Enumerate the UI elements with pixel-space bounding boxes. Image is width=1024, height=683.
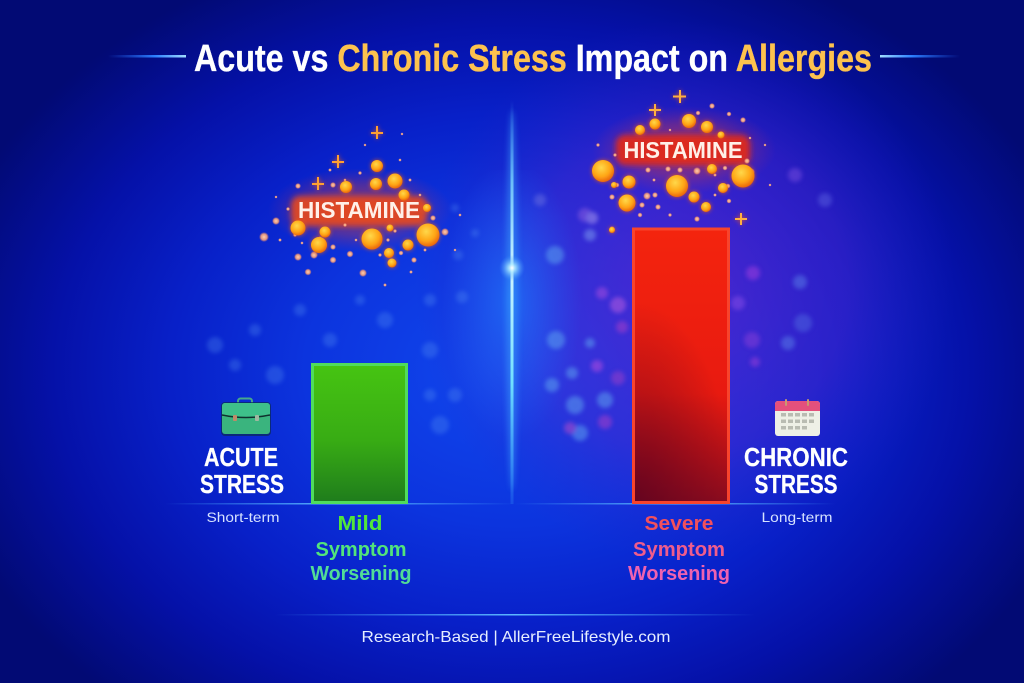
title: Acute vs Chronic Stress Impact on Allergies: [194, 38, 872, 80]
label: histamine: HISTAMINE: [624, 137, 742, 163]
caption: short-term: Short-term: [206, 510, 280, 525]
bar: chronic: [634, 229, 728, 502]
orange spheres: chronic: [592, 114, 754, 233]
label: mild symptom worsening: Mild: [338, 513, 382, 535]
orange spheres: acute: [290, 160, 440, 268]
icon: calendar: [775, 399, 820, 436]
footer divider: [275, 614, 755, 616]
background bokeh: right: [534, 168, 832, 441]
label: severe symptom worsening: Symptom: [633, 539, 725, 561]
label: acute stress: ACUTE: [204, 442, 278, 472]
footer text: Research-Based | AllerFreeLifestyle.com: [362, 629, 670, 646]
plus sparkles: chronic: [649, 90, 747, 225]
icon: briefcase: [221, 398, 271, 436]
label: mild symptom worsening: Worsening: [310, 563, 412, 585]
caption: long-term: Long-term: [762, 510, 832, 525]
small particles: acute: [259, 132, 462, 287]
background bokeh: left: [207, 204, 479, 434]
bar: acute: [312, 364, 406, 502]
label: severe symptom worsening: [628, 513, 730, 585]
baseline: [165, 503, 835, 504]
label: chronic stress: [744, 442, 848, 499]
plus sparkles: acute: [312, 126, 383, 190]
label: mild symptom worsening: [310, 513, 412, 585]
label: mild symptom worsening: Symptom: [316, 539, 406, 561]
center divider with flare: [499, 100, 525, 504]
label: chronic stress: CHRONIC: [744, 442, 848, 472]
label: histamine: HISTAMINE: [298, 197, 420, 223]
label: severe symptom worsening: Severe: [644, 513, 714, 535]
label: chronic stress: STRESS: [754, 469, 838, 499]
histamine cluster: chronic: [592, 90, 776, 233]
label: acute stress: STRESS: [200, 469, 284, 499]
label: acute stress: [200, 442, 284, 499]
histamine cluster: acute: [259, 126, 462, 287]
small particles: chronic: [596, 103, 772, 232]
label: severe symptom worsening: Worsening: [628, 563, 730, 585]
